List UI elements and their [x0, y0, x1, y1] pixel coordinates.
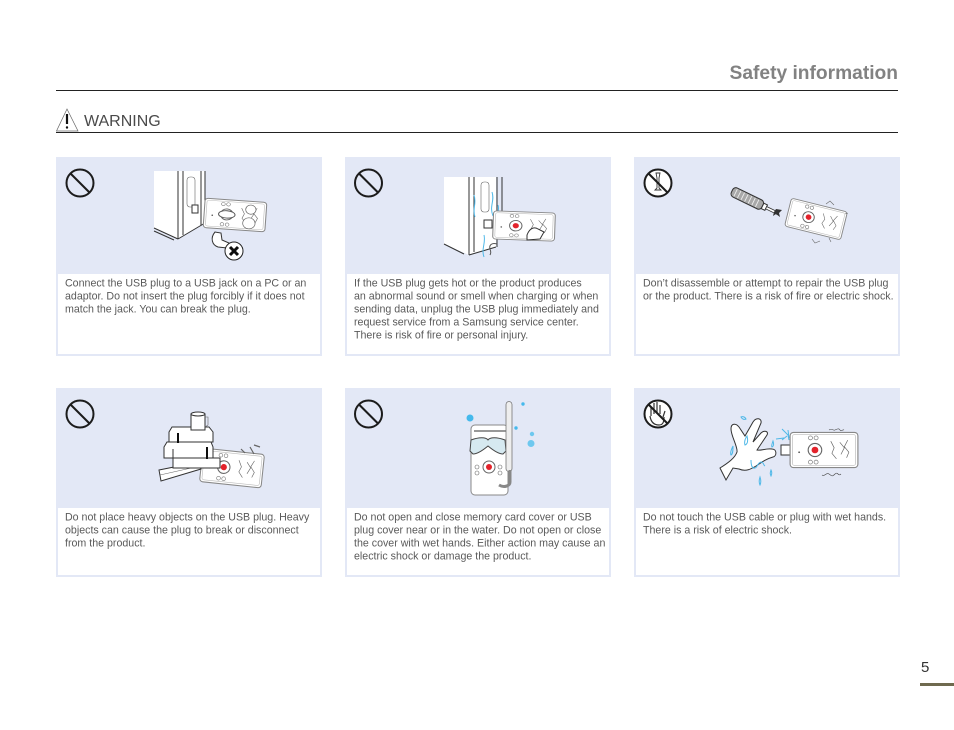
panel: USB jack	[56, 157, 322, 355]
text block: an abnormal sound or smell when charging or when	[354, 290, 598, 302]
text block: match the jack. You can break the plug.	[65, 304, 251, 316]
icon: prohibition	[355, 170, 382, 196]
icon: no hand	[644, 400, 672, 428]
text block: adaptor. Do not insert the plug forcibly if it does not	[65, 290, 305, 302]
page number: 5	[921, 659, 929, 676]
text block: There is a risk of electric shock.	[643, 524, 792, 536]
text block: request service from a Samsung service center.	[354, 316, 579, 328]
text block: Do not place heavy objects on the USB plug. Heavy	[65, 512, 310, 524]
illustration: wet hand and plug	[720, 417, 858, 485]
icon: no screwdriver	[644, 170, 672, 196]
text block: Do not touch the USB cable or plug with wet hands.	[643, 512, 886, 524]
page title: Safety information	[730, 63, 898, 84]
icon: prohibition	[66, 400, 94, 428]
text block: objects can cause the plug to break or disconnect	[65, 524, 299, 536]
panel: hot plug	[345, 157, 611, 355]
text block: Connect the USB plug to a USB jack on a PC or an	[65, 278, 306, 290]
icon: warning triangle	[56, 109, 78, 131]
illustration: books on plug	[159, 412, 264, 488]
icon: prohibition	[355, 400, 382, 428]
panel: water	[345, 388, 611, 576]
illustration: overheating plug	[444, 177, 555, 257]
illustration: screwdriver and camera	[730, 187, 848, 243]
text block	[65, 512, 310, 550]
warning heading	[56, 109, 161, 131]
warning heading: WARNING	[84, 113, 161, 130]
panel: disassemble	[634, 157, 900, 355]
text block	[354, 278, 599, 342]
panel: wet hands	[634, 388, 900, 576]
text block	[65, 278, 306, 316]
text block: sending data, unplug the USB plug immediately and	[354, 304, 599, 316]
text block: Do not open and close memory card cover or USB	[354, 512, 592, 524]
text block: plug cover near or in the water. Do not open or close	[354, 524, 601, 536]
illustration: plug forced into PC	[154, 171, 267, 260]
text block	[643, 278, 894, 302]
text block: There is risk of fire or personal injury.	[354, 330, 528, 342]
text block: electric shock or damage the product.	[354, 550, 531, 562]
text block: from the product.	[65, 538, 145, 550]
text block: If the USB plug gets hot or the product produces	[354, 278, 582, 290]
icon: prohibition	[66, 170, 94, 196]
text block: Don’t disassemble or attempt to repair the USB plug	[643, 278, 889, 290]
text block: the cover with wet hands. Either action may cause an	[354, 538, 605, 550]
text block	[643, 512, 886, 536]
illustration: camera with snorkel	[466, 402, 534, 495]
text block	[354, 512, 605, 562]
panel: heavy objects	[56, 388, 322, 576]
text block: or the product. There is a risk of fire or electric shock.	[643, 290, 894, 302]
